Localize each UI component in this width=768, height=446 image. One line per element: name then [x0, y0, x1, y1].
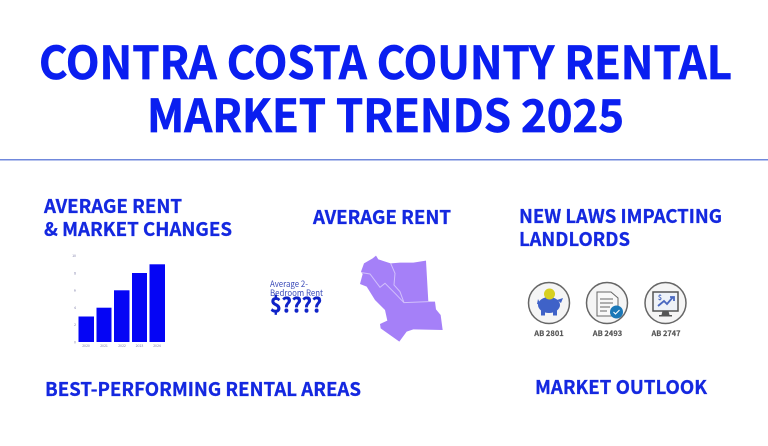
- bar chart: 2021: [100, 344, 108, 349]
- bar chart: [72, 254, 165, 349]
- icon: AB 2801 piggy bank: AB 2801: [533, 328, 564, 339]
- bar chart: 2: [74, 323, 76, 328]
- heading: new laws impacting landlords: LANDLORDS: [519, 225, 630, 252]
- icon: AB 2747 monitor: $: [658, 293, 662, 303]
- icon: AB 2801 piggy bank: [528, 282, 570, 339]
- heading: average rent and market changes: AVERAGE RENT: [43, 192, 182, 219]
- bar chart: 2024: [153, 344, 161, 349]
- heading: new laws impacting landlords: NEW LAWS IMPACTING: [519, 202, 722, 229]
- average 2-bedroom rent label: Average 2-: [270, 278, 308, 290]
- average 2-bedroom rent label: [270, 278, 324, 299]
- heading: new laws impacting landlords: [519, 202, 722, 252]
- bar chart: 2023: [136, 344, 143, 349]
- heading: average rent and market changes: & MARKET CHANGES: [44, 215, 232, 242]
- map: Contra Costa County: [360, 256, 443, 342]
- icon: AB 2747 monitor: AB 2747: [651, 328, 681, 339]
- bar chart: 8: [74, 272, 76, 276]
- heading: average rent: AVERAGE RENT: [312, 203, 451, 230]
- icon: AB 2747 monitor: [645, 282, 686, 339]
- bar chart: 10: [72, 254, 76, 259]
- title: CONTRA COSTA COUNTY RENTAL: [39, 27, 732, 92]
- bar chart: 0: [74, 340, 76, 346]
- average 2-bedroom rent label: Bedroom Rent: [270, 287, 324, 299]
- heading: market outlook: MARKET OUTLOOK: [535, 373, 708, 400]
- heading: average rent and market changes: [43, 192, 232, 242]
- title: [39, 27, 732, 145]
- bar chart: 2020: [82, 344, 90, 349]
- rent value: $????: [270, 289, 322, 318]
- bar chart: 4: [74, 306, 76, 311]
- icon: AB 2493 document: [586, 282, 628, 339]
- bar chart: 2022: [118, 344, 126, 349]
- bar chart: 6: [74, 288, 76, 294]
- heading: best-performing rental areas: BEST-PERFORMING RENTAL AREAS: [45, 375, 361, 402]
- title: MARKET TRENDS 2025: [147, 80, 624, 145]
- icon: AB 2493 document: AB 2493: [592, 328, 622, 339]
